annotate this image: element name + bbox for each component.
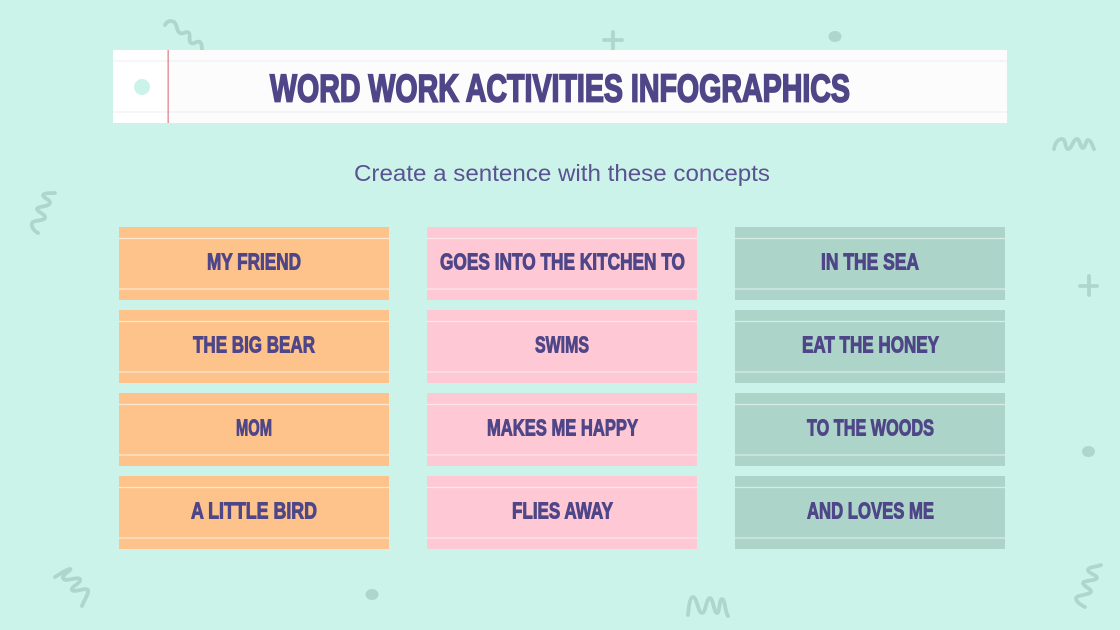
- doodle: squiggle top right: [1054, 139, 1094, 149]
- card: in the sea: [735, 227, 1005, 300]
- card: flies away: [427, 476, 697, 549]
- card: makes me happy: MAKES ME HAPPY: [487, 414, 638, 440]
- doodle: plus top: [604, 32, 622, 49]
- card: flies away: FLIES AWAY: [512, 498, 613, 524]
- card: eat the honey: EAT THE HONEY: [802, 332, 939, 358]
- card: goes into the kitchen to: [427, 227, 697, 300]
- card: to the woods: TO THE WOODS: [807, 414, 934, 440]
- card: goes into the kitchen to: GOES INTO THE KITCHEN TO: [440, 248, 685, 274]
- card: swims: [427, 310, 697, 383]
- doodle: squiggle bottom right: [1076, 565, 1101, 607]
- banner margin line: [168, 50, 169, 123]
- title banner: [113, 50, 1007, 123]
- card: a little bird: [119, 476, 389, 549]
- card: mom: [119, 393, 389, 466]
- doodle: squiggle top left: [165, 21, 202, 50]
- card: and loves me: [735, 476, 1005, 549]
- card: to the woods: [735, 393, 1005, 466]
- column: subjects: [119, 227, 389, 549]
- doodle: squiggle bottom centre: [688, 597, 728, 616]
- doodle: squiggle bottom left: [55, 569, 88, 606]
- column: actions: [427, 227, 697, 549]
- card: a little bird: A LITTLE BIRD: [191, 498, 317, 524]
- doodle: dot bottom: [366, 589, 378, 600]
- title: WORD WORK ACTIVITIES INFOGRAPHICS: [270, 68, 850, 110]
- card: my friend: [119, 227, 389, 300]
- doodle: plus right: [1080, 276, 1097, 295]
- card: the big bear: [119, 310, 389, 383]
- banner punch hole: [134, 79, 150, 95]
- card: makes me happy: [427, 393, 697, 466]
- doodle: squiggle left: [32, 193, 55, 233]
- doodle: dot right: [1082, 446, 1095, 457]
- card: my friend: MY FRIEND: [207, 248, 301, 274]
- card: and loves me: AND LOVES ME: [807, 498, 934, 524]
- card: mom: MOM: [236, 414, 272, 440]
- subtitle: Create a sentence with these concepts: [354, 160, 770, 186]
- card: the big bear: THE BIG BEAR: [193, 332, 315, 358]
- card: in the sea: IN THE SEA: [821, 248, 919, 274]
- column: endings: [735, 227, 1005, 549]
- doodle: dot top: [828, 31, 842, 42]
- card: eat the honey: [735, 310, 1005, 383]
- card: swims: SWIMS: [535, 332, 589, 358]
